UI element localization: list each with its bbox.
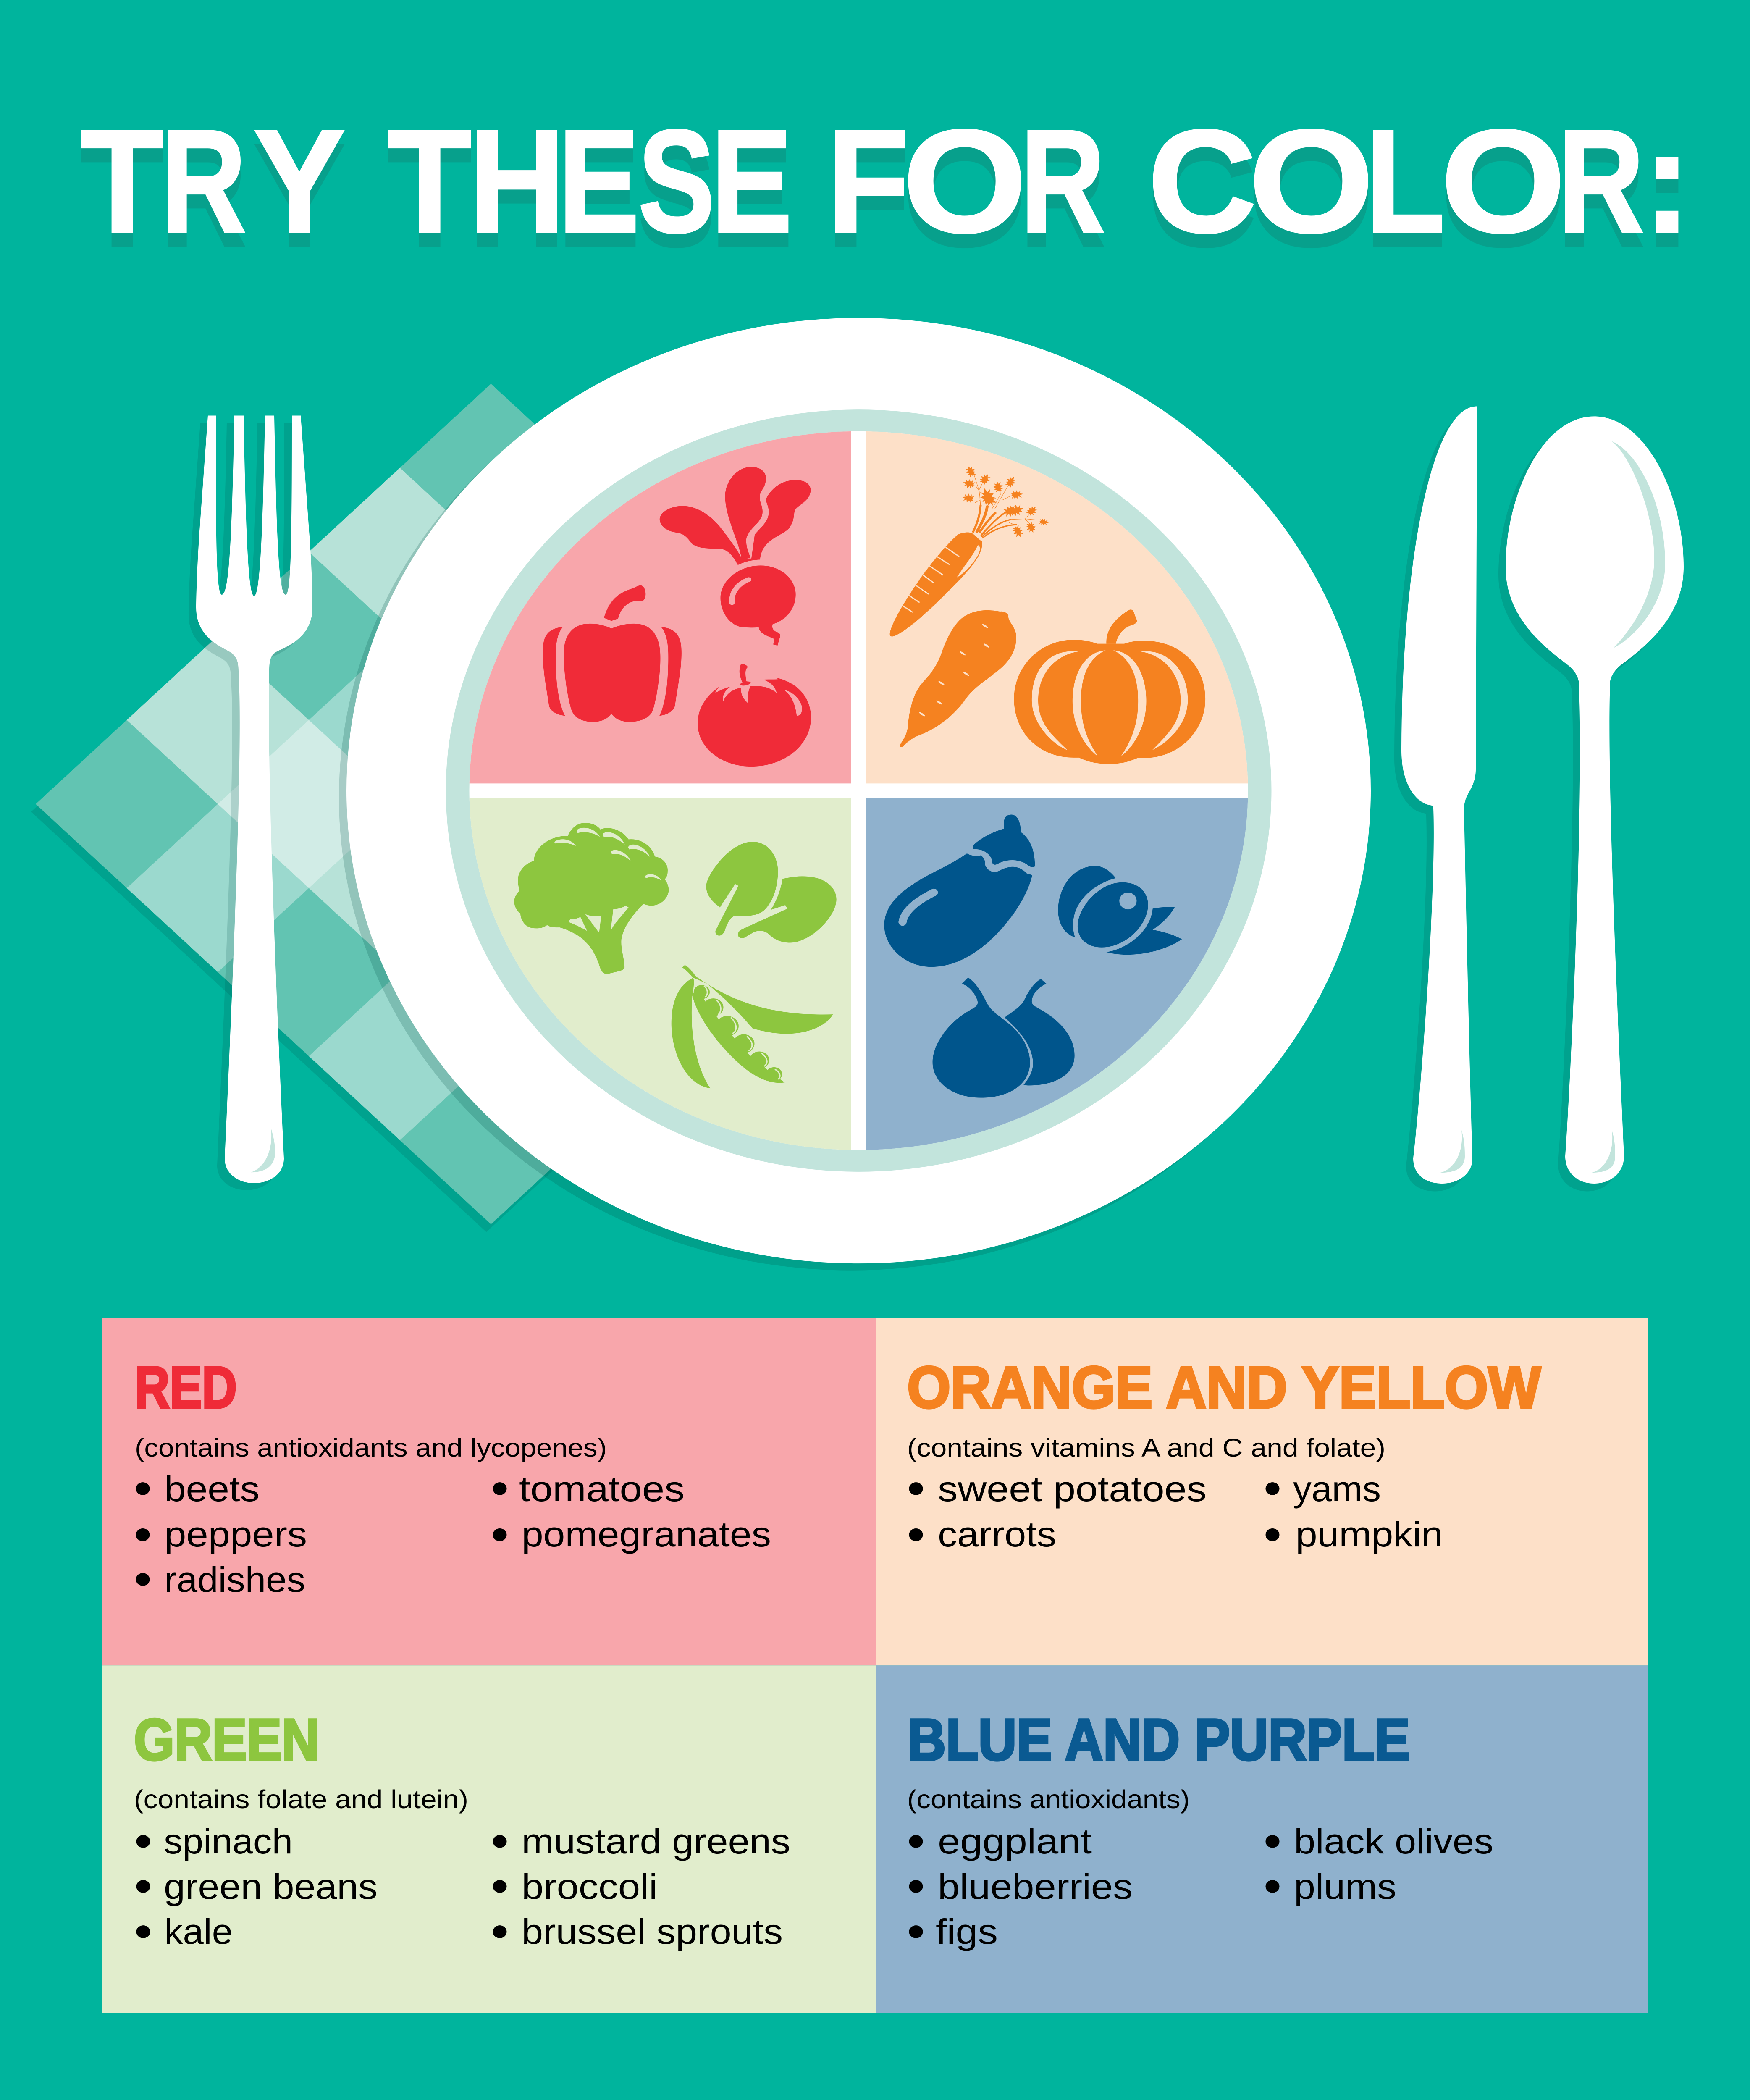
list: green foods: mustard greens bbox=[522, 1821, 790, 1861]
icon: blue vegetables bbox=[884, 815, 1182, 1098]
icon: carrot greens bbox=[961, 464, 1049, 539]
icon: green vegetables bbox=[514, 823, 837, 1088]
title: E bbox=[558, 100, 640, 263]
icon: spoon bbox=[1498, 416, 1684, 1191]
title: S bbox=[638, 100, 715, 263]
title: C bbox=[1148, 100, 1257, 263]
panel: red bbox=[102, 1318, 876, 1665]
title: O bbox=[1440, 100, 1566, 263]
list: orange foods: pumpkin bbox=[1296, 1514, 1443, 1554]
title: R bbox=[1021, 100, 1105, 263]
title: R bbox=[1558, 100, 1644, 263]
list: green foods bbox=[136, 1821, 790, 1951]
list: blue foods: figs bbox=[936, 1911, 998, 1951]
note: red nutrients: (contains antioxidants and lycopenes) bbox=[135, 1434, 607, 1462]
title: F bbox=[827, 100, 909, 263]
heading: green: GREEN bbox=[134, 1707, 319, 1772]
panel: orange quadrant bbox=[866, 431, 1248, 783]
note: blue nutrients: (contains antioxidants) bbox=[907, 1785, 1190, 1814]
icon: fork bbox=[189, 415, 312, 1190]
title: H bbox=[469, 100, 565, 263]
title bbox=[81, 100, 1692, 263]
title: : bbox=[1643, 100, 1692, 263]
panel: blue and purple bbox=[876, 1665, 1648, 2013]
panel: orange and yellow bbox=[876, 1318, 1648, 1665]
napkin bbox=[31, 384, 946, 1232]
list: green foods: green beans bbox=[164, 1866, 378, 1906]
panel: green bbox=[102, 1665, 876, 2013]
title: O bbox=[903, 100, 1027, 263]
list: blue foods: plums bbox=[1294, 1866, 1396, 1906]
list: red foods: radishes bbox=[164, 1559, 305, 1599]
title: L bbox=[1365, 100, 1446, 263]
list: green foods: kale bbox=[164, 1911, 233, 1951]
list: blue foods: eggplant bbox=[938, 1821, 1092, 1861]
panel: blue quadrant bbox=[866, 798, 1248, 1150]
list: blue foods: black olives bbox=[1294, 1821, 1493, 1861]
title: T bbox=[81, 100, 164, 263]
icon: red vegetables bbox=[543, 467, 811, 766]
list: blue foods: blueberries bbox=[938, 1866, 1133, 1906]
list: green foods: brussel sprouts bbox=[522, 1911, 783, 1951]
list: green foods: spinach bbox=[164, 1821, 293, 1861]
note: orange nutrients: (contains vitamins A and C and folate) bbox=[907, 1434, 1385, 1462]
heading: blue and purple: BLUE AND PURPLE bbox=[908, 1707, 1410, 1772]
list: orange foods: carrots bbox=[938, 1514, 1056, 1554]
icon: orange vegetables bbox=[890, 532, 1205, 764]
note: green nutrients: (contains folate and lutein) bbox=[134, 1785, 468, 1814]
list: green foods: broccoli bbox=[522, 1866, 658, 1906]
plate bbox=[339, 318, 1371, 1270]
list: orange foods bbox=[909, 1469, 1443, 1554]
list: orange foods: sweet potatoes bbox=[938, 1469, 1207, 1509]
list: red foods: peppers bbox=[164, 1514, 307, 1554]
list: blue foods bbox=[909, 1821, 1493, 1951]
panel: red quadrant bbox=[470, 431, 851, 783]
list: red foods: beets bbox=[164, 1469, 260, 1509]
heading: red: RED bbox=[135, 1354, 237, 1420]
panel: green quadrant bbox=[470, 798, 851, 1150]
title: E bbox=[711, 100, 792, 263]
title: Y bbox=[253, 100, 345, 263]
list: red foods bbox=[136, 1469, 771, 1599]
title: R bbox=[161, 100, 246, 263]
heading: orange and yellow: ORANGE AND YELLOW bbox=[907, 1354, 1541, 1420]
title: O bbox=[1249, 100, 1374, 263]
list: orange foods: yams bbox=[1293, 1469, 1381, 1509]
icon: knife bbox=[1394, 406, 1477, 1191]
title: T bbox=[388, 100, 472, 263]
list: red foods: tomatoes bbox=[519, 1469, 685, 1509]
list: red foods: pomegranates bbox=[522, 1514, 771, 1554]
